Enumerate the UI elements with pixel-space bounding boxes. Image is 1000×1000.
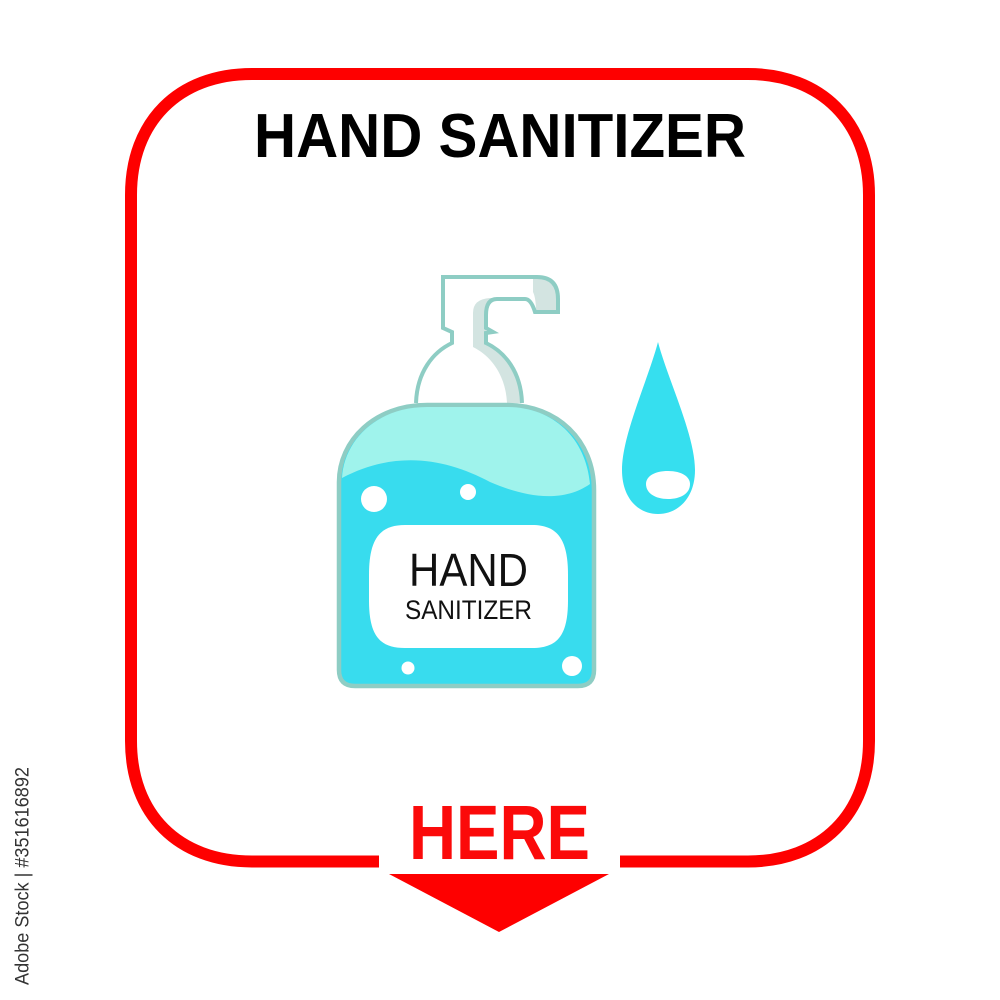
bottle upper liquid wave xyxy=(342,407,590,496)
arrow down xyxy=(389,874,609,932)
pump head xyxy=(416,277,559,403)
here label: HERE xyxy=(409,790,590,876)
icon: pump bottle xyxy=(339,277,594,686)
stock id: Adobe Stock | #351616892 xyxy=(12,767,34,985)
bubbles xyxy=(361,484,582,676)
label text: sanitizer: SANITIZER xyxy=(405,595,532,625)
title: HAND SANITIZER xyxy=(254,102,746,171)
red rounded frame xyxy=(131,74,869,862)
label panel xyxy=(369,525,568,648)
icon: drop xyxy=(622,342,695,514)
pump outline xyxy=(416,277,558,403)
bottle body xyxy=(339,405,594,686)
drop highlight xyxy=(646,471,690,499)
label text: hand: HAND xyxy=(409,544,528,596)
pump shading xyxy=(473,278,559,403)
